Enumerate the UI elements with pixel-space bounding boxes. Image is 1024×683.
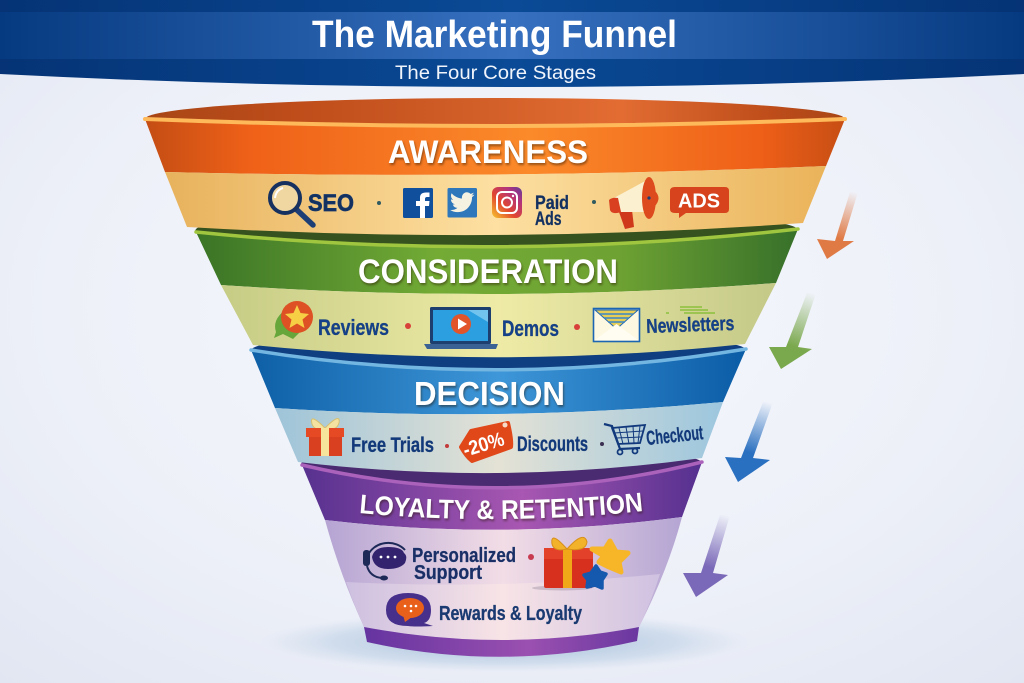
bullet <box>377 201 381 205</box>
text: checkout: Checkout <box>645 422 704 450</box>
icon: newsletter envelope <box>594 308 640 342</box>
heading: consideration: CONSIDERATION <box>358 253 618 291</box>
speed lines <box>666 307 715 313</box>
arrow: down from loyalty <box>683 515 730 597</box>
ground shadow <box>260 612 750 672</box>
panel: loyalty and retention stage <box>300 458 704 657</box>
icon: gift box and stars <box>532 537 628 590</box>
text: seo: SEO <box>308 190 354 217</box>
icon: facebook <box>403 188 433 218</box>
icon: reviews badge <box>274 301 313 339</box>
icon: headset support <box>363 543 406 580</box>
text: free trials: Free Trials <box>351 434 434 457</box>
text: rewards and loyalty: Rewards & Loyalty <box>439 603 583 625</box>
heading: loyalty and retention: LOYALTY & RETENTION <box>360 492 644 522</box>
title: The Marketing Funnel <box>312 14 677 56</box>
bullet <box>574 324 580 330</box>
header banner <box>0 0 1024 87</box>
icon: magnifying glass <box>270 183 313 225</box>
icon: twitter <box>448 188 477 218</box>
arrow: consideration to decision <box>769 293 816 369</box>
icon: chat bubble <box>386 593 433 626</box>
icon: ads speech bubble <box>670 187 729 218</box>
panel: decision stage <box>251 331 746 473</box>
heading: awareness: AWARENESS <box>388 134 588 170</box>
icon: laptop with video <box>424 307 498 349</box>
text: reviews: Reviews <box>318 315 389 340</box>
text: paid ads <box>535 193 569 230</box>
text: personalized support: Personalized <box>412 545 516 567</box>
arrow: awareness to consideration <box>817 192 858 259</box>
bullet <box>528 554 534 560</box>
bullet <box>592 200 596 204</box>
bullet <box>445 444 449 448</box>
text: paid ads: Paid <box>535 193 569 214</box>
heading: decision: DECISION <box>414 375 565 412</box>
bullet <box>600 442 604 446</box>
icon: shopping cart <box>604 424 645 454</box>
text: personalized support <box>412 545 516 584</box>
icon: discount tag: -20% <box>460 428 507 462</box>
text: newsletters: Newsletters <box>646 313 735 338</box>
icon: instagram <box>492 187 522 218</box>
icon: megaphone <box>609 177 658 229</box>
arrow: decision to loyalty <box>725 402 773 482</box>
text: discounts: Discounts <box>517 433 588 456</box>
panel: consideration stage <box>195 208 798 357</box>
icon: gift box <box>306 419 344 456</box>
text: paid ads: Ads <box>535 209 562 230</box>
subtitle: The Four Core Stages <box>395 63 596 84</box>
text: personalized support: Support <box>414 562 482 584</box>
bullet <box>405 323 411 329</box>
text: demos: Demos <box>502 316 559 341</box>
icon: ads speech bubble: ADS <box>678 190 720 212</box>
panel: awareness stage <box>145 98 845 235</box>
